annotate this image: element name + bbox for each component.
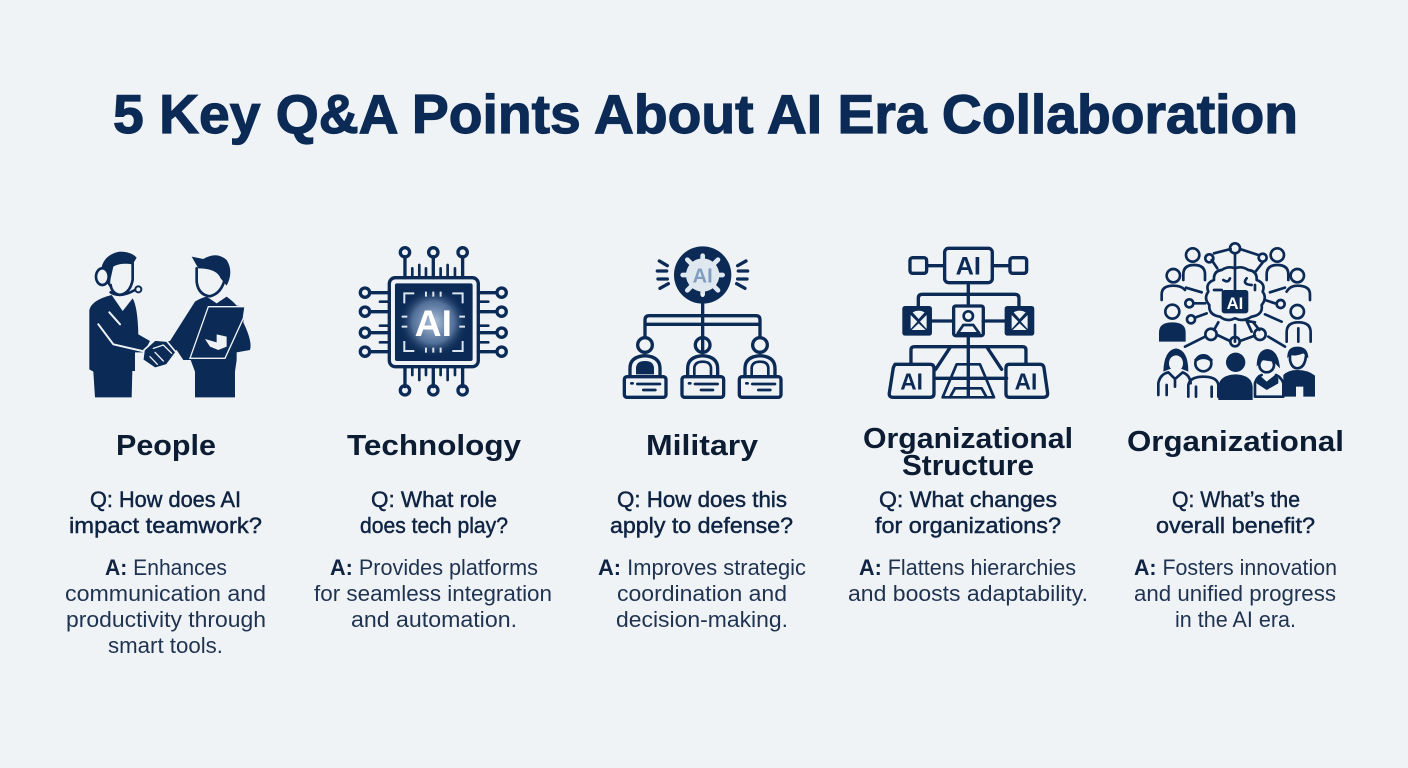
icon: organizational structure chart: AI bbox=[900, 369, 923, 395]
answer: Organizational Structure bbox=[848, 555, 1088, 606]
answer: Technology: A: Provides platforms bbox=[330, 555, 538, 580]
icon: people shaking hands bbox=[89, 252, 251, 397]
answer: People bbox=[65, 555, 266, 658]
answer: Technology: and automation. bbox=[351, 607, 517, 632]
question: People bbox=[69, 487, 262, 538]
icon: AI chip: AI bbox=[415, 302, 452, 344]
answer: Technology bbox=[314, 555, 552, 632]
question: People: impact teamwork? bbox=[69, 513, 262, 538]
question: Organizational Structure: Q: What changes bbox=[879, 487, 1057, 512]
icon: AI chip bbox=[360, 248, 506, 395]
column: Technology bbox=[314, 430, 552, 632]
answer: Organizational: in the AI era. bbox=[1175, 607, 1296, 632]
answer: People: productivity through bbox=[66, 607, 266, 632]
heading: Organizational Structure: Organizational bbox=[863, 423, 1073, 455]
question: Technology bbox=[360, 487, 508, 538]
question: Military bbox=[610, 487, 793, 538]
lock three bbox=[739, 338, 781, 397]
icon: organizational structure chart: AI bbox=[1015, 369, 1037, 395]
brain bbox=[1206, 267, 1265, 332]
heading: Organizational: Organizational bbox=[1127, 426, 1344, 458]
answer: Military: A: Improves strategic bbox=[598, 555, 806, 580]
surrounding people bbox=[1159, 248, 1311, 342]
column: Military bbox=[598, 430, 806, 632]
heading: Technology: Technology bbox=[347, 430, 521, 462]
question: Technology: Q: What role bbox=[371, 487, 497, 512]
heading: Military: Military bbox=[646, 430, 758, 462]
answer: Military bbox=[598, 555, 806, 632]
question: Military: apply to defense? bbox=[610, 513, 793, 538]
column: People bbox=[65, 430, 266, 658]
answer: Technology: for seamless integration bbox=[314, 581, 552, 606]
answer: People: communication and bbox=[65, 581, 266, 606]
column: Organizational Structure bbox=[848, 423, 1088, 606]
heading: Organizational Structure bbox=[863, 423, 1073, 482]
icon: organizational structure chart bbox=[889, 248, 1048, 397]
answer: Organizational: A: Fosters innovation bbox=[1134, 555, 1337, 580]
lock two bbox=[682, 338, 724, 397]
question: People: Q: How does AI bbox=[90, 487, 241, 512]
question: Organizational Structure bbox=[875, 487, 1061, 538]
front row people bbox=[1158, 347, 1315, 400]
question: Organizational: Q: What’s the bbox=[1172, 487, 1300, 512]
icon: military AI command hierarchy: AI bbox=[693, 265, 713, 287]
icon: AI brain network with people: AI bbox=[1227, 294, 1243, 313]
answer: Organizational Structure: A: Flattens hierarchies bbox=[859, 555, 1076, 580]
question: Technology: does tech play? bbox=[360, 513, 508, 538]
answer: Organizational bbox=[1134, 555, 1337, 632]
icon: military AI command hierarchy bbox=[624, 246, 781, 397]
lock one bbox=[624, 338, 666, 397]
heading: People: People bbox=[116, 430, 216, 462]
question: Military: Q: How does this bbox=[617, 487, 787, 512]
question: Organizational: overall benefit? bbox=[1156, 513, 1315, 538]
heading: Organizational Structure: Structure bbox=[902, 450, 1034, 482]
title: 5 Key Q&A Points About AI Era Collaboration bbox=[113, 83, 1298, 145]
column: Organizational bbox=[1127, 426, 1344, 632]
answer: Organizational: and unified progress bbox=[1134, 581, 1336, 606]
answer: People: A: Enhances bbox=[105, 555, 227, 580]
question: Organizational bbox=[1156, 487, 1315, 538]
icon: AI brain network with people bbox=[1158, 243, 1315, 400]
question: Organizational Structure: for organizations? bbox=[875, 513, 1061, 538]
answer: People: smart tools. bbox=[108, 633, 223, 658]
answer: Military: decision-making. bbox=[616, 607, 788, 632]
answer: Organizational Structure: and boosts adaptability. bbox=[848, 581, 1088, 606]
answer: Military: coordination and bbox=[617, 581, 787, 606]
icon: organizational structure chart: AI bbox=[956, 252, 981, 280]
